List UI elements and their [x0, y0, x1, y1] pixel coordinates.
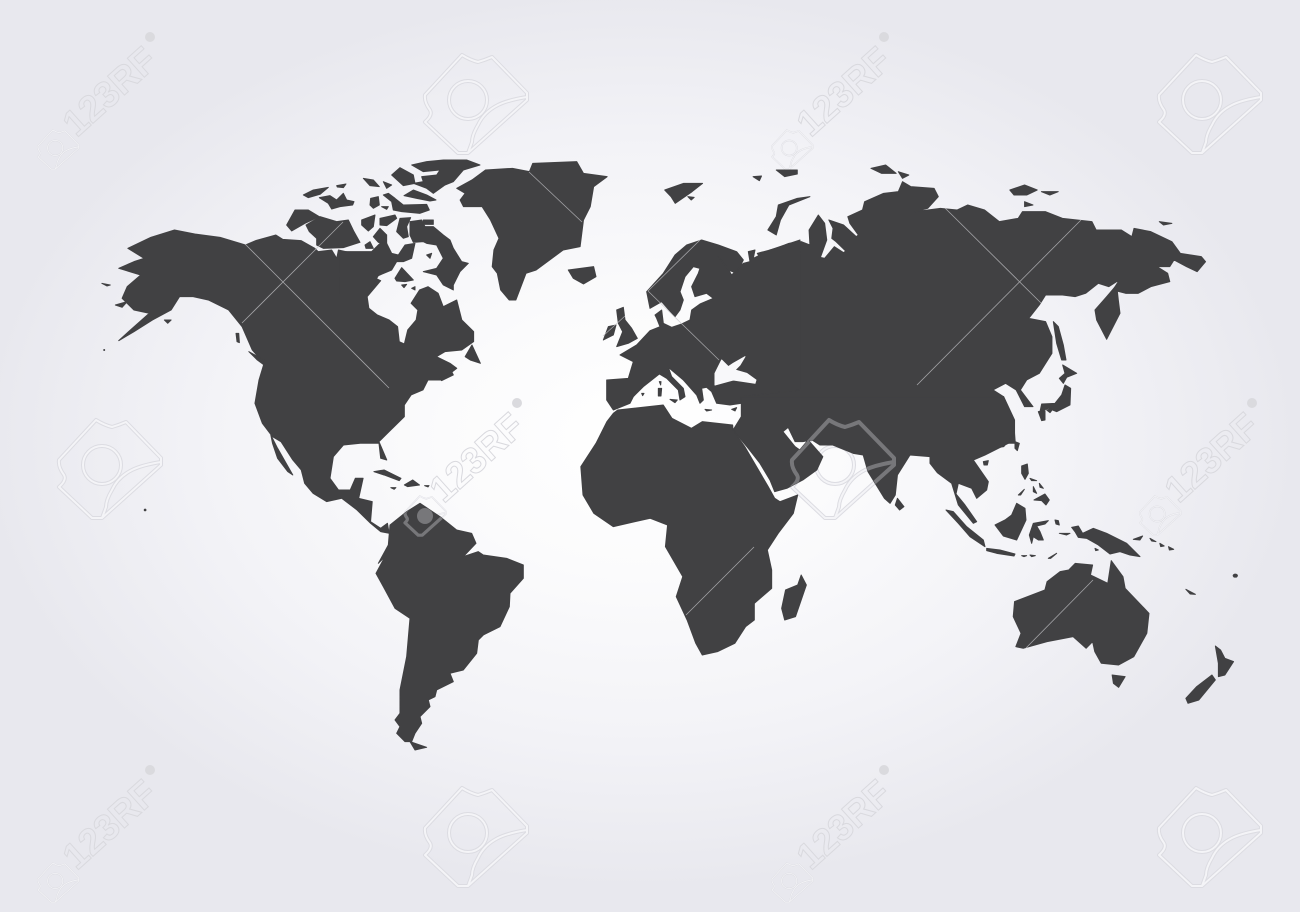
continent: Africa — [581, 405, 806, 655]
Sri Lanka and Pacific islets — [895, 498, 1238, 594]
Tasmania — [1112, 675, 1125, 687]
continent: Australia — [1013, 561, 1149, 687]
continent: Eurasia — [607, 182, 1206, 523]
polar and northwest Pacific islands — [665, 165, 1172, 235]
Southeast Asian islands — [946, 442, 1156, 558]
Tierra del Fuego — [410, 742, 427, 750]
New Zealand — [1186, 646, 1234, 703]
continent: North America — [102, 230, 480, 533]
Black Sea — [715, 357, 756, 385]
watermark logos: 123RF — [789, 39, 899, 144]
watermark logos: 123RF — [422, 405, 532, 510]
Greenland — [457, 162, 607, 300]
Baja California — [271, 435, 293, 475]
Europe and Anatolia — [607, 240, 800, 410]
Canadian Arctic islands — [287, 160, 480, 295]
continent: South America — [376, 503, 523, 750]
European and Arctic islands — [603, 307, 737, 411]
Madagascar — [782, 575, 806, 620]
Russia and northern Asia — [742, 182, 1206, 443]
Indochina and Malay Peninsula — [930, 430, 1013, 523]
Iceland — [568, 267, 596, 284]
Pacific and Atlantic islands — [102, 283, 480, 511]
land masses — [102, 160, 1238, 750]
South Asia and Arabia — [733, 397, 1015, 503]
watermark stamps over land — [405, 420, 894, 535]
Sakhalin, Japan and Kamchatka — [1038, 285, 1120, 421]
thin watermark lines across land — [242, 172, 1093, 648]
watermark logos: 123RF — [55, 39, 165, 144]
watermark logos: 123RF — [1157, 405, 1267, 510]
Caribbean islands — [374, 470, 429, 489]
watermark logos: 123RF — [789, 772, 899, 877]
watermark logos: 123RF — [55, 772, 165, 877]
